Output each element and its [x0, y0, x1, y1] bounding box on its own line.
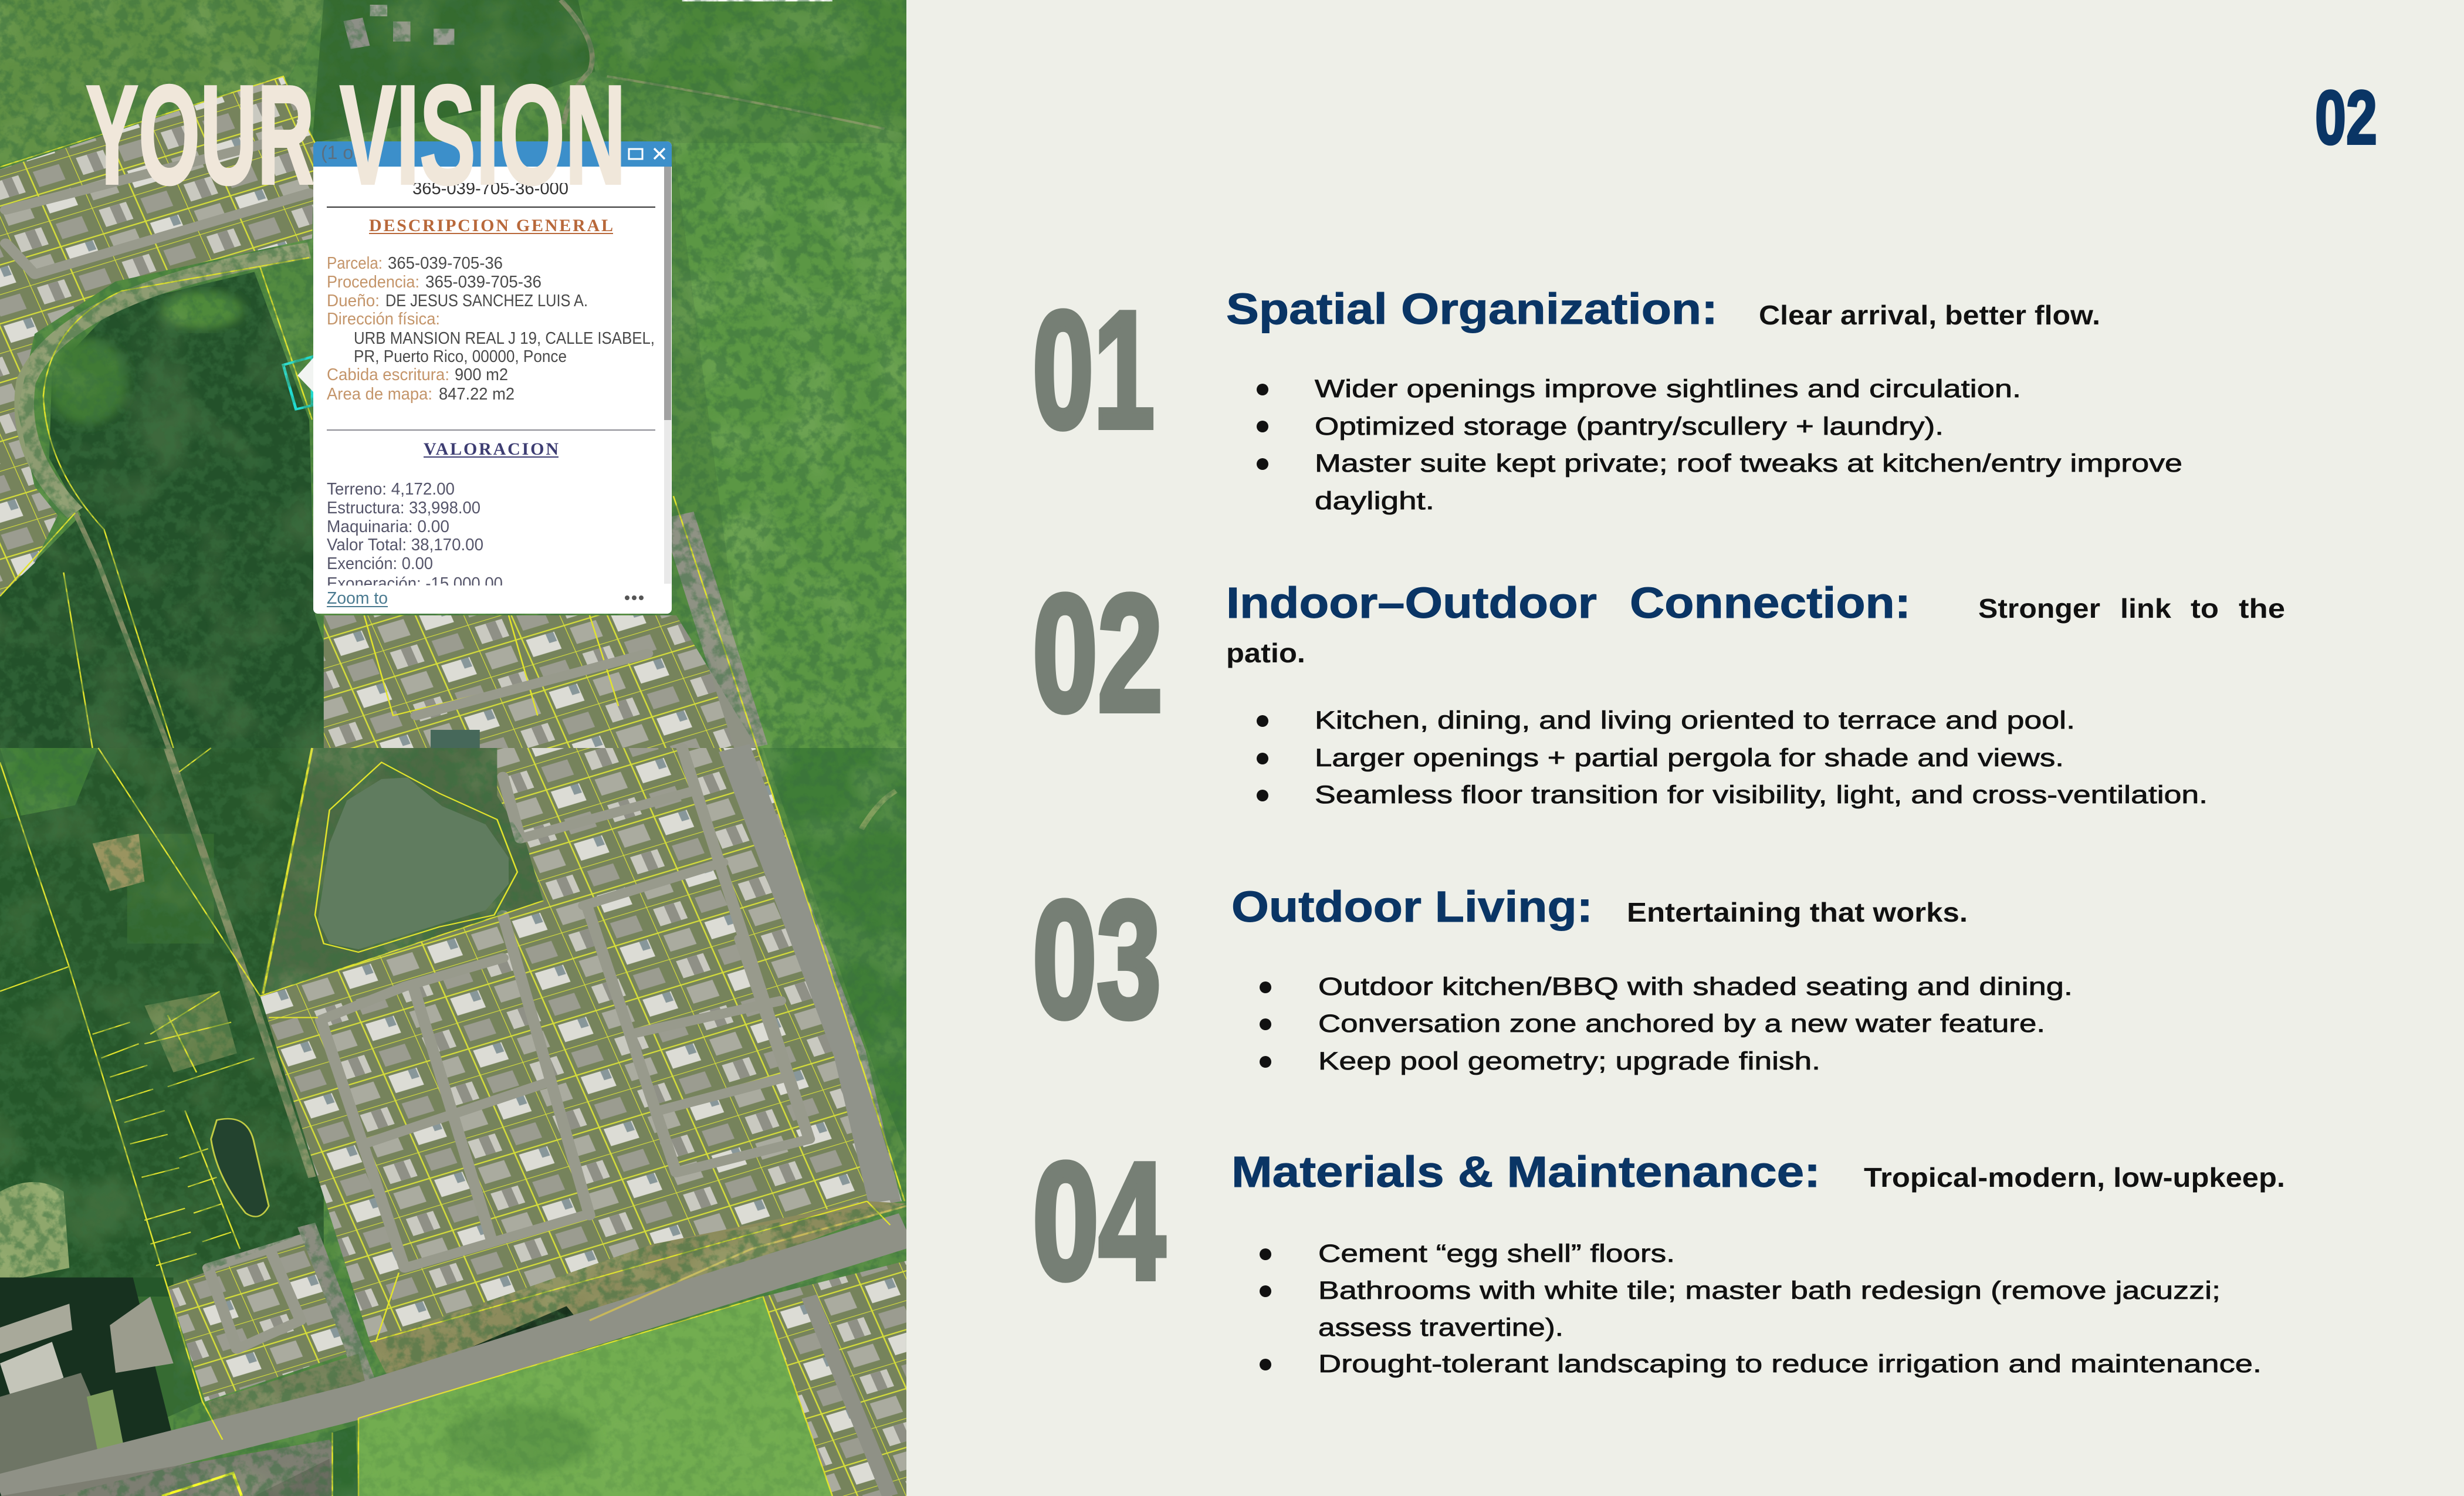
bullets 04: [1260, 1240, 2262, 1378]
parcel info popup: [297, 141, 672, 614]
title: YOUR: [86, 56, 314, 214]
parcel description fields: PR, Puerto Rico, 00000, Ponce: [354, 347, 567, 366]
section 02: indoor-outdoor connection: [1033, 560, 2285, 809]
parcel description fields: [327, 254, 655, 404]
parcel description fields: Dueño:: [327, 292, 380, 310]
bullets 04: assess travertine).: [1318, 1314, 1563, 1342]
parcel description fields: Parcela:: [327, 254, 383, 273]
popup pointer: [297, 358, 313, 392]
heading: valoracion: VALORACION: [424, 439, 559, 459]
heading 04: Materials & Maintenance:: [1231, 1148, 1820, 1196]
parcel description fields: Area de mapa:: [327, 385, 432, 404]
valuation fields: Valor Total: 38,170.00: [327, 536, 483, 554]
bullets 03: Conversation zone anchored by a new water feature.: [1318, 1010, 2045, 1038]
section 03: outdoor living: [1033, 867, 2073, 1075]
bullets 01: daylight.: [1315, 487, 1434, 515]
parcel description fields: 365-039-705-36: [388, 254, 503, 273]
bullets 04: Cement “egg shell” floors.: [1318, 1240, 1675, 1268]
heading 02: Connection:: [1630, 578, 1911, 627]
valuation fields: Exención: 0.00: [327, 554, 433, 573]
parcel description fields: 847.22 m2: [439, 385, 515, 404]
number 01: 01: [1033, 277, 1155, 462]
bullets 01: [1257, 375, 2182, 515]
tagline 02: [1226, 593, 2285, 668]
bullets 04: Bathrooms with white tile; master bath redesign (remove jacuzzi;: [1318, 1277, 2221, 1305]
bullets 04: Drought-tolerant landscaping to reduce irrigation and maintenance.: [1318, 1350, 2262, 1378]
more options dots: [625, 595, 644, 600]
tagline 02: to: [2191, 593, 2219, 624]
zoom to link: Zoom to: [327, 589, 388, 608]
number 02: 02: [1033, 560, 1163, 746]
tagline 02: Stronger: [1978, 593, 2100, 624]
number 03: 03: [1033, 867, 1161, 1052]
heading 03: Outdoor Living:: [1231, 882, 1593, 931]
bullets 03: [1260, 973, 2073, 1075]
parcel description fields: Cabida escritura:: [327, 365, 449, 384]
tagline 02: patio.: [1226, 638, 1305, 668]
panel: aerial parcel map: [0, 0, 906, 1496]
heading: descripcion general: DESCRIPCION GENERAL: [369, 216, 613, 235]
bullets 01: Optimized storage (pantry/scullery + laundry).: [1315, 412, 1944, 441]
popup card: [313, 141, 672, 614]
map: lake: [315, 762, 517, 952]
section 01: spatial organization: [1033, 277, 2182, 515]
valuation fields: Estructura: 33,998.00: [327, 499, 480, 517]
tagline 02: the: [2239, 593, 2285, 624]
bullets 01: Wider openings improve sightlines and circulation.: [1315, 375, 2021, 403]
title: VISION: [340, 56, 626, 214]
bullets 03: Outdoor kitchen/BBQ with shaded seating and dining.: [1318, 973, 2073, 1001]
parcel description fields: Procedencia:: [327, 273, 419, 292]
popup header bar: [313, 141, 672, 167]
tagline 01: Clear arrival, better flow.: [1759, 300, 2100, 330]
valuation fields: Terreno: 4,172.00: [327, 480, 455, 499]
tagline 03: Entertaining that works.: [1627, 897, 1968, 928]
page number: 02: [2315, 75, 2377, 160]
tagline 04: Tropical-modern, low-upkeep.: [1864, 1162, 2285, 1193]
popup scrollbar: [664, 167, 671, 584]
heading 02: Indoor–Outdoor: [1226, 578, 1597, 627]
parcel description fields: DE JESUS SANCHEZ LUIS A.: [385, 292, 588, 310]
heading 01: Spatial Organization:: [1226, 285, 1718, 333]
bullets 02: Larger openings + partial pergola for shade and views.: [1315, 744, 2064, 772]
valuation fields: [327, 480, 503, 593]
valuation fields: Exoneración: -15,000.00: [327, 574, 503, 593]
parcel description fields: URB MANSION REAL J 19, CALLE ISABEL,: [354, 329, 655, 348]
map: upper section vegetation and housing: [0, 0, 906, 749]
bullets 02: [1257, 706, 2208, 809]
map: pond: [211, 1119, 269, 1217]
heading 02: [1226, 578, 1911, 627]
bullets 02: Kitchen, dining, and living oriented to terrace and pool.: [1315, 706, 2075, 735]
popup header bar: (1 of: [321, 142, 358, 163]
section 04: materials and maintenance: [1033, 1128, 2285, 1378]
number 04: 04: [1033, 1128, 1166, 1314]
map: vegetation texture overlays: [0, 0, 906, 1496]
parcel description fields: Dirección física:: [327, 310, 440, 329]
bullets 01: Master suite kept private; roof tweaks at kitchen/entry improve: [1315, 449, 2182, 478]
tagline 02: link: [2120, 593, 2171, 624]
parcel description fields: 365-039-705-36: [425, 273, 541, 292]
parcel description fields: 900 m2: [455, 365, 508, 384]
valuation fields: Maquinaria: 0.00: [327, 517, 449, 536]
map: lower section neighbourhood, field and roads: [0, 748, 906, 1496]
parcel number: 365-039-705-36-000: [412, 179, 568, 198]
bullets 03: Keep pool geometry; upgrade finish.: [1318, 1047, 1820, 1075]
bullets 02: Seamless floor transition for visibility, light, and cross-ventilation.: [1315, 781, 2208, 809]
